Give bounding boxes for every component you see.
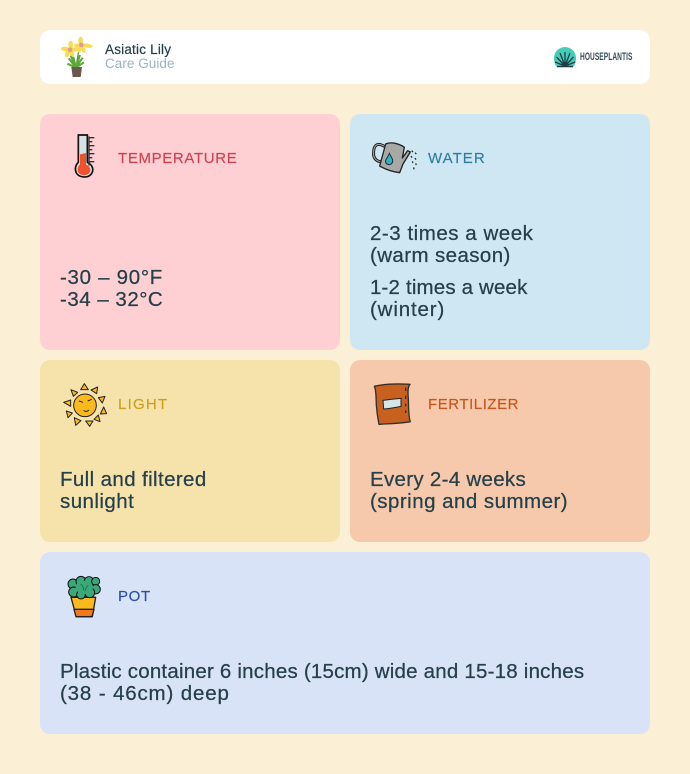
heading: temperature: TEMPERATURE (118, 150, 237, 167)
icon: sun (63, 383, 108, 427)
light requirement: sunlight (60, 490, 134, 513)
light requirement (60, 468, 207, 513)
subtitle: Care Guide (105, 56, 175, 71)
pot description (60, 660, 584, 705)
icon: potted lily (61, 36, 93, 77)
icon: fertilizer bag (374, 383, 411, 425)
watering frequency warm season: 2-3 times a week (370, 222, 533, 245)
watering frequency winter (370, 276, 528, 321)
heading: water: WATER (428, 150, 486, 167)
watering frequency winter: (winter) (370, 298, 445, 321)
panel: temperature (40, 114, 340, 350)
fertilizer schedule: Every 2-4 weeks (370, 468, 526, 491)
temperature values (60, 266, 163, 311)
temperature values: -34 – 32°C (60, 288, 163, 311)
fertilizer schedule: (spring and summer) (370, 490, 568, 513)
title: Asiatic Lily (105, 42, 171, 57)
panel: fertilizer (350, 360, 650, 542)
heading: pot: POT (118, 588, 151, 605)
heading: fertilizer: FERTILIZER (428, 396, 519, 413)
pot description: Plastic container 6 inches (15cm) wide and 15-18 inches (60, 660, 584, 683)
watering frequency warm season: (warm season) (370, 244, 511, 267)
icon: potted plant (68, 576, 101, 618)
icon: logo plant (554, 47, 576, 68)
panel: water (350, 114, 650, 350)
icon: watering can (372, 142, 417, 174)
watering frequency winter: 1-2 times a week (370, 276, 528, 299)
heading: light: LIGHT (118, 396, 168, 413)
pot description: (38 - 46cm) deep (60, 682, 230, 705)
fertilizer schedule (370, 468, 568, 513)
temperature values: -30 – 90°F (60, 266, 163, 289)
icon: thermometer (74, 134, 94, 178)
panel: light (40, 360, 340, 542)
logo: Houseplantis (554, 47, 632, 68)
watering frequency warm season (370, 222, 534, 267)
panel: pot (40, 552, 650, 734)
light requirement: Full and filtered (60, 468, 207, 491)
header bar (40, 30, 650, 84)
logo wordmark: HOUSEPLANTIS (580, 51, 632, 63)
